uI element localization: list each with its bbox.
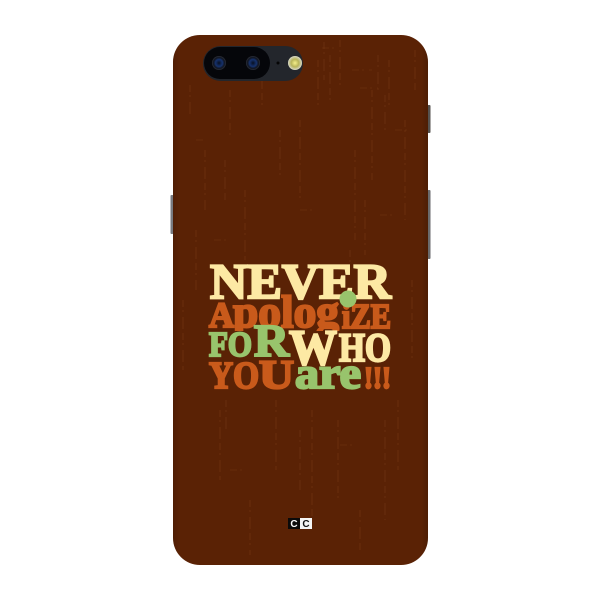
brand logo	[288, 518, 312, 530]
R: R	[254, 315, 290, 366]
A: A	[209, 295, 234, 335]
sensor dot	[276, 62, 280, 64]
side buttons	[170, 105, 430, 259]
iZE: iZE	[342, 297, 391, 336]
HO: HO	[339, 325, 391, 370]
phone case body	[173, 35, 428, 565]
letter C left: C	[290, 519, 298, 530]
NEVER: NEVER	[210, 253, 392, 309]
camera lens housing	[204, 47, 270, 79]
green dot	[340, 290, 356, 308]
YO: YO	[209, 355, 259, 397]
flash	[288, 56, 302, 70]
distressed scratch texture	[183, 40, 415, 555]
right lens	[246, 56, 260, 70]
FO: FO	[209, 325, 252, 364]
left lens	[212, 56, 226, 70]
camera module	[203, 46, 303, 81]
polog: polog	[233, 286, 339, 337]
W: W	[289, 319, 337, 375]
U: U	[259, 352, 294, 397]
letter C right: C	[302, 519, 310, 530]
slogan artwork	[208, 264, 393, 390]
are: are	[295, 349, 361, 398]
exclamation marks: !!!	[364, 360, 391, 395]
